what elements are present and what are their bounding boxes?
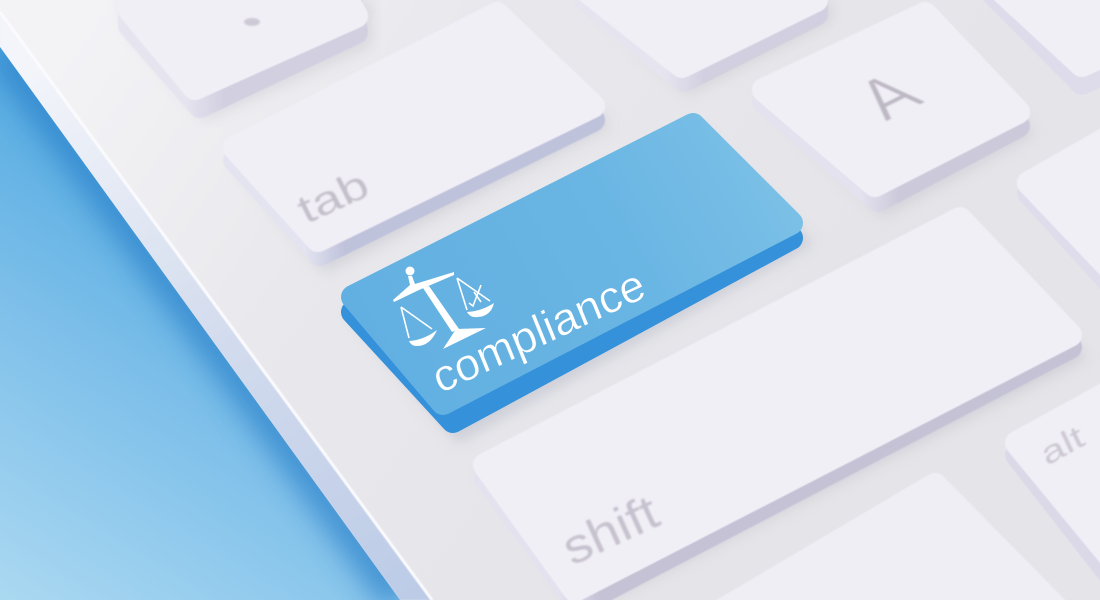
key: alt xyxy=(1017,392,1100,574)
key: compliance xyxy=(345,125,814,444)
key side xyxy=(353,128,791,421)
key: tab xyxy=(235,12,612,274)
label: alt: alt xyxy=(1035,418,1090,472)
key: top right xyxy=(990,0,1100,83)
key: upper left xyxy=(120,0,372,120)
key: bottom xyxy=(720,485,1060,600)
label: compliance: compliance xyxy=(425,258,652,403)
key: top middle xyxy=(585,0,832,96)
icon: scales of justice xyxy=(393,266,494,349)
blue desk surface xyxy=(0,47,400,600)
faint key mark xyxy=(244,18,260,26)
label: shift: shift xyxy=(554,484,666,575)
key: A xyxy=(764,14,1036,218)
label: tab: tab xyxy=(290,162,376,232)
label: A: A xyxy=(840,60,938,132)
key: right edge xyxy=(1029,137,1100,282)
key face xyxy=(353,125,791,403)
